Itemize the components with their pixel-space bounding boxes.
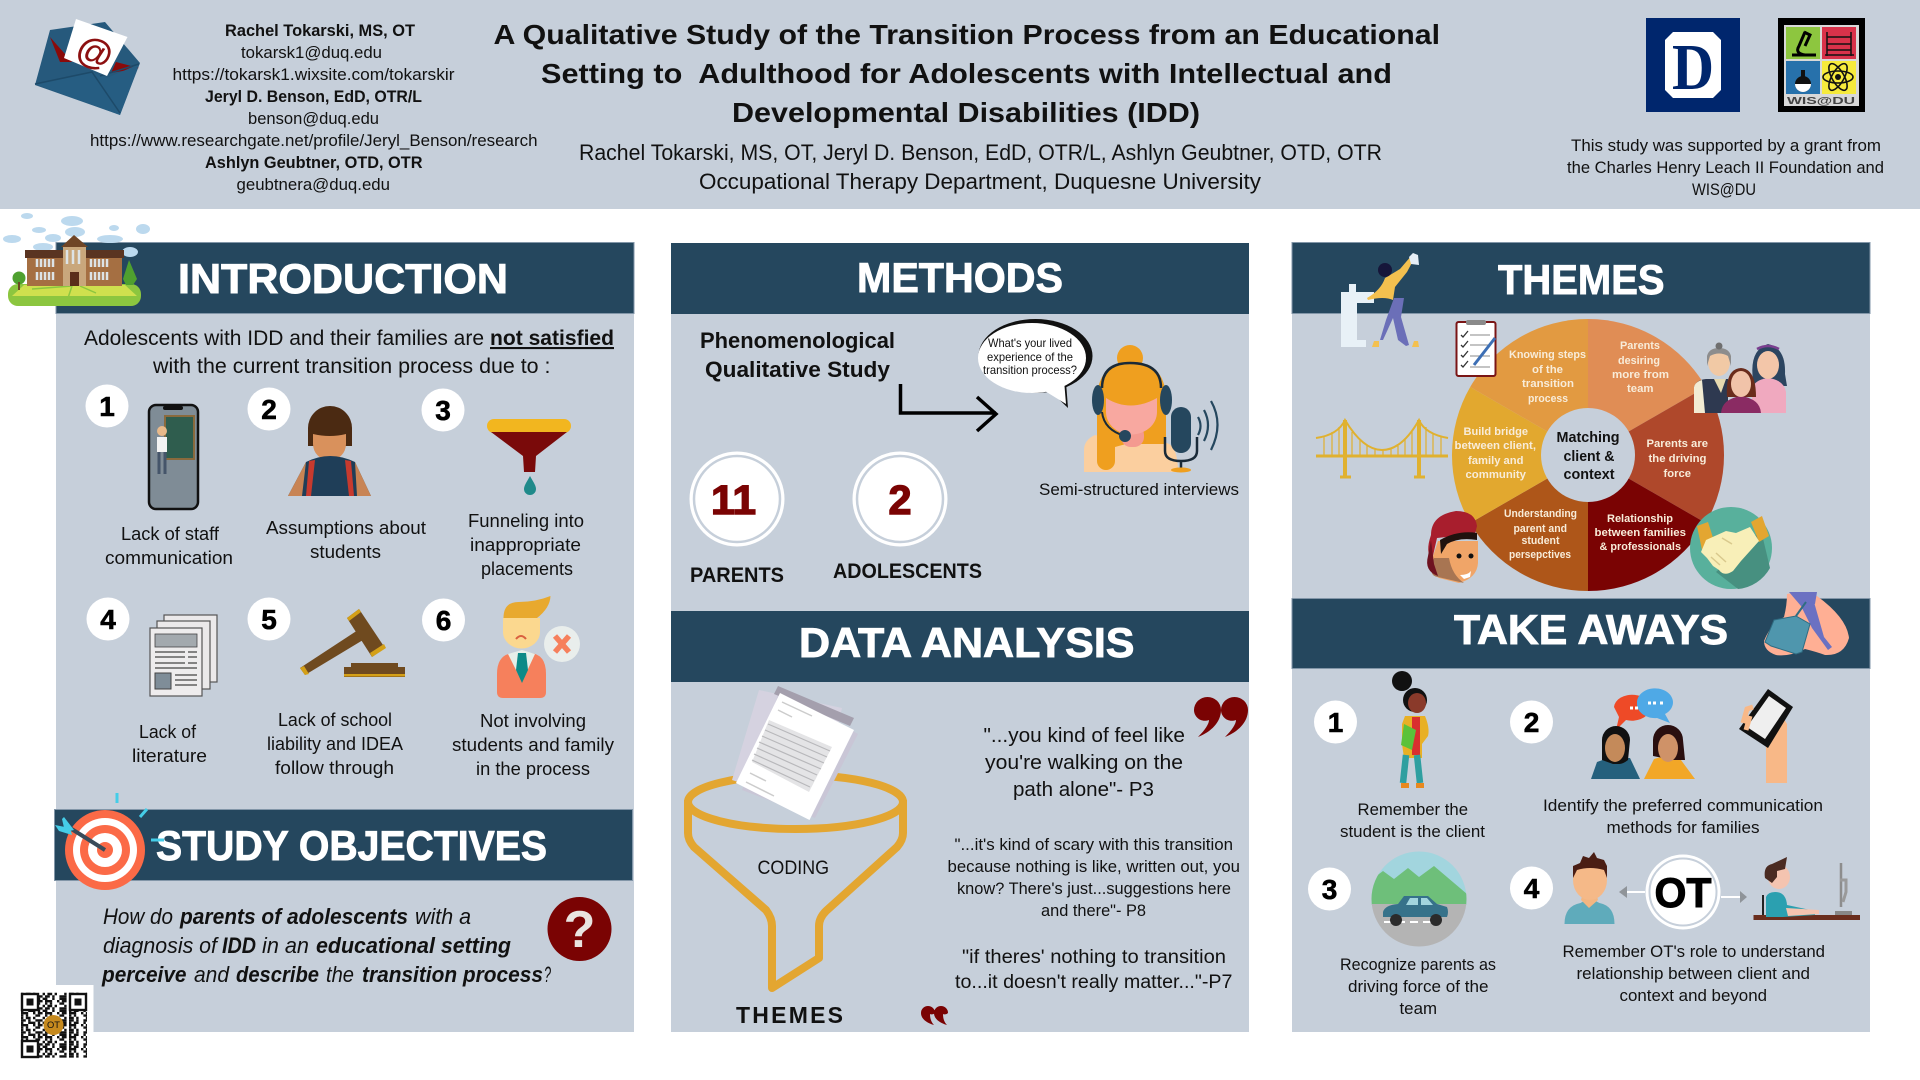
reason 1: staff communication: 1	[99, 391, 115, 422]
reason 3: funneling: Funneling into	[468, 511, 584, 531]
reason 3: funneling: 3	[435, 395, 451, 426]
takeaway 1: student is the client: student is the client	[1340, 823, 1485, 841]
reason 6: not involving	[422, 596, 614, 779]
contact details: Ashlyn Geubtner, OTD, OTR	[205, 154, 423, 172]
segment: driving force: the driving	[1648, 453, 1706, 465]
icon: person at computer	[1754, 857, 1860, 920]
reason 4: literature	[86, 598, 217, 766]
icon: open envelope with @	[35, 19, 140, 115]
funding note: the Charles Henry Leach II Foundation and	[1567, 159, 1884, 177]
QR code	[0, 985, 94, 1063]
quote: nothing to transition to: to...it doesn't really matter..."-P7	[955, 972, 1232, 993]
contact details: Jeryl D. Benson, EdD, OTR/L	[205, 88, 422, 106]
heading: data analysis	[671, 611, 1249, 682]
icon: target with arrow	[55, 793, 164, 890]
icon: gavel	[300, 609, 405, 677]
takeaway 4: OT role: context and beyond	[1620, 987, 1767, 1005]
icon: bridge	[1316, 420, 1448, 478]
heading: study objectives	[54, 810, 632, 880]
quote: scary transition	[948, 836, 1240, 920]
takeaway 3: parents driving force: team	[1400, 1000, 1437, 1018]
reason 6: not involving: Not involving	[480, 711, 586, 731]
reason 1: staff communication: communication	[105, 548, 233, 568]
segment: driving force	[1646, 438, 1708, 480]
panel: methods and data analysis	[671, 243, 1249, 1032]
research question: educational setting	[316, 933, 512, 958]
icon: interviewer with headset and microphone	[1084, 345, 1218, 472]
quote: walking alone: "...you kind of feel like	[984, 724, 1185, 747]
reason 4: literature: literature	[132, 746, 207, 766]
research question: describe	[236, 962, 319, 987]
icon: car on road	[1371, 851, 1467, 948]
reason 2: assumptions: students	[310, 542, 381, 562]
reason 5: liability: Lack of school	[278, 710, 392, 730]
segment: driving force: force	[1664, 468, 1691, 480]
speech bubble: transition process?	[983, 363, 1077, 377]
segment: relationship: & professionals	[1600, 541, 1681, 553]
quote: walking alone: path alone"- P3	[1013, 778, 1154, 801]
logo: WIS@DU	[1778, 18, 1865, 112]
heading: take aways	[1292, 598, 1870, 668]
icon: girl with book	[1392, 671, 1429, 788]
research question: in an	[262, 933, 309, 958]
segment: parents desiring more: desiring	[1618, 355, 1660, 367]
research question	[101, 904, 551, 987]
icon: traveller with bag	[1764, 592, 1849, 655]
stat: 2 adolescents: 2	[888, 477, 912, 523]
contact details: https://tokarsk1.wixsite.com/tokarskir	[172, 66, 455, 84]
icon: open envelope with @: @	[72, 26, 119, 77]
stat: 2 adolescents	[833, 452, 982, 583]
reason 1: staff communication: Lack of staff	[121, 524, 220, 544]
heading: methods	[671, 243, 1249, 314]
quote: walking alone	[984, 724, 1185, 801]
research question: ?	[544, 962, 551, 987]
icon: clipboard	[1456, 320, 1496, 376]
segment: knowing steps	[1509, 349, 1586, 405]
quote: nothing to transition to: "if theres' nothing to transition	[962, 947, 1226, 968]
stat: 11 parents: 11	[711, 477, 756, 523]
takeaway 3: parents driving force: Recognize parents as	[1340, 956, 1496, 974]
segment: build bridge: between client,	[1454, 440, 1536, 452]
quote: scary transition: and there"- P8	[1041, 902, 1146, 920]
icon: papers	[150, 615, 217, 696]
icon: handshake	[1690, 507, 1772, 589]
icon: phone	[149, 405, 198, 509]
reason 6: not involving: students and family	[452, 735, 614, 755]
reason 4: literature: Lack of	[139, 722, 197, 742]
segment: relationship: Relationship	[1607, 513, 1673, 525]
takeaway 2: communication methods	[1510, 688, 1823, 837]
icon: question mark: ?	[564, 901, 595, 959]
heading: themes	[1292, 242, 1870, 314]
title: Setting to Adulthood for Adolescents with Intellectual and	[541, 58, 1392, 89]
reason 5: liability: 5	[261, 604, 277, 635]
research question: parents of adolescents	[179, 904, 408, 929]
stat: 11 parents	[690, 452, 784, 587]
contact details: tokarsk1@duq.edu	[241, 44, 382, 62]
reason 5: liability: liability and IDEA	[267, 734, 403, 754]
wheel centre label: Matching	[1556, 430, 1620, 446]
header band	[0, 0, 1920, 209]
icon: funnel	[487, 419, 571, 495]
authors and department: Rachel Tokarski, MS, OT, Jeryl D. Benson, EdD, OTR/L, Ashlyn Geubtner, OTD, OTR	[579, 140, 1382, 165]
title	[494, 19, 1440, 128]
segment: parents desiring more: more from	[1612, 369, 1669, 381]
icon: family	[1694, 342, 1787, 413]
icon: frowning man with cross	[497, 596, 580, 698]
study type: Phenomenological	[700, 328, 895, 353]
speech bubble	[978, 319, 1092, 408]
quote: walking alone: you're walking on the	[985, 751, 1183, 774]
segment: relationship	[1594, 513, 1686, 553]
study type: Qualitative Study	[705, 357, 891, 382]
research question: the	[326, 962, 354, 987]
chart: themes wheel	[1452, 319, 1724, 591]
reason 3: funneling: placements	[481, 559, 573, 579]
OT circle with arrows	[1619, 854, 1747, 930]
research question: How do	[103, 904, 173, 929]
icon: student	[288, 406, 371, 496]
quote: scary transition: know? There's just...suggestions here	[957, 880, 1231, 898]
intro statement: not satisfied	[490, 327, 614, 350]
takeaway 4: OT role: relationship between client and	[1576, 965, 1810, 983]
segment: relationship: between families	[1594, 527, 1686, 539]
takeaway 4: OT role	[1510, 852, 1860, 1005]
intro statement: with the current transition process due to :	[152, 355, 550, 378]
segment: knowing steps: process	[1528, 393, 1568, 405]
research question: perceive	[101, 962, 186, 987]
takeaway 4: OT role: 4	[1524, 873, 1540, 904]
segment: perspectives	[1504, 508, 1577, 561]
diagram: coding funnel	[688, 686, 903, 1028]
reason 1: staff communication	[86, 384, 233, 568]
icon: client portrait	[1564, 852, 1614, 924]
segment: knowing steps: transition	[1522, 378, 1574, 390]
segment: perspectives: student	[1522, 535, 1560, 547]
icon: closing quote marks	[1194, 697, 1248, 737]
funding note: WIS@DU	[1692, 181, 1756, 199]
research question: transition process	[362, 962, 543, 987]
reason 6: not involving: in the process	[476, 759, 590, 779]
wheel centre label: client &	[1564, 449, 1615, 465]
icon: documents	[732, 686, 858, 820]
stat: 2 adolescents: ADOLESCENTS	[833, 560, 982, 583]
icon: opening quote marks	[921, 1006, 948, 1025]
heading: methods: METHODS	[857, 254, 1063, 301]
segment: driving force: Parents are	[1646, 438, 1708, 450]
authors and department: Occupational Therapy Department, Duquesne University	[699, 169, 1261, 194]
authors and department	[579, 140, 1382, 194]
reason 5: liability	[248, 598, 405, 778]
reason 3: funneling: inappropriate	[470, 535, 581, 555]
takeaway 3: parents driving force	[1308, 851, 1496, 1018]
takeaway 1: student is the client: 1	[1328, 707, 1343, 738]
quote: nothing to transition to	[955, 947, 1232, 993]
quote: scary transition: because nothing is like, written out, you	[948, 858, 1240, 876]
heading: take aways: TAKE AWAYS	[1454, 606, 1728, 653]
wheel centre label: context	[1564, 467, 1615, 483]
quote: scary transition: "...it's kind of scary with this transition	[954, 836, 1233, 854]
takeaway 2: communication methods: 2	[1524, 707, 1539, 738]
segment: perspectives: Understanding	[1504, 508, 1577, 520]
takeaway 3: parents driving force: 3	[1322, 874, 1337, 905]
takeaway 2: communication methods: methods for families	[1606, 819, 1760, 837]
segment: parents desiring more: Parents	[1620, 340, 1660, 352]
segment: build bridge: family and	[1468, 455, 1524, 467]
funding note: This study was supported by a grant from	[1571, 137, 1881, 155]
reason 5: liability: follow through	[275, 758, 394, 778]
research question: with a	[415, 904, 471, 929]
reason 2: assumptions: 2	[261, 394, 277, 425]
reason 4: literature: 4	[100, 604, 116, 635]
segment: parents desiring more: team	[1627, 383, 1654, 395]
diagram: coding funnel: CODING	[758, 858, 829, 879]
takeaway 1: student is the client	[1314, 671, 1485, 841]
segment: perspectives: parent and	[1514, 523, 1567, 535]
takeaway 2: communication methods: Identify the preferred communication	[1543, 797, 1823, 815]
contact details: Rachel Tokarski, MS, OT	[225, 22, 415, 40]
heading: study objectives: STUDY OBJECTIVES	[156, 822, 547, 869]
intro statement	[84, 327, 614, 378]
caption: interviews: Semi-structured interviews	[1039, 480, 1239, 499]
title: Developmental Disabilities (IDD)	[732, 97, 1200, 128]
takeaway 3: parents driving force: driving force of the	[1348, 978, 1488, 996]
segment: perspectives: persepctives	[1509, 549, 1571, 561]
speech bubble: experience of the	[987, 350, 1073, 364]
stat: 11 parents: PARENTS	[690, 564, 784, 587]
panel: introduction and objectives	[3, 213, 634, 1032]
logo: Duquesne D	[1646, 18, 1740, 112]
segment: knowing steps: Knowing steps	[1509, 349, 1586, 361]
title: A Qualitative Study of the Transition Process from an Educational	[494, 19, 1440, 50]
OT circle with arrows: OT	[1654, 869, 1712, 916]
reason 2: assumptions: Assumptions about	[266, 518, 426, 538]
intro statement: Adolescents with IDD and their families are	[84, 327, 484, 350]
diagram: coding funnel: THEMES	[736, 1002, 843, 1028]
contact details: https://www.researchgate.net/profile/Jeryl_Benson/research	[90, 132, 538, 150]
speech bubble: What's your lived	[988, 336, 1072, 350]
study type	[700, 328, 895, 382]
contact details	[90, 22, 538, 194]
segment: build bridge: Build bridge	[1464, 426, 1528, 438]
heading: themes: THEMES	[1498, 256, 1664, 303]
segment: build bridge	[1454, 426, 1536, 481]
icon: two people talking	[1591, 688, 1695, 779]
wheel centre label	[1556, 430, 1620, 483]
research question: and	[194, 962, 230, 987]
research question: IDD	[222, 933, 256, 958]
contact details: benson@duq.edu	[248, 110, 379, 128]
reason 2: assumptions	[248, 388, 426, 562]
contact details: geubtnera@duq.edu	[236, 176, 390, 194]
logo: Duquesne D: D	[1672, 31, 1714, 104]
research question: diagnosis of	[103, 933, 220, 958]
heading: data analysis: DATA ANALYSIS	[799, 619, 1134, 666]
heading: introduction	[56, 242, 634, 314]
icon: woman at printer	[1341, 253, 1419, 347]
logo: WIS@DU: WIS@DU	[1787, 96, 1855, 107]
takeaway 4: OT role: Remember OT's role to understand	[1562, 943, 1825, 961]
reason 6: not involving: 6	[436, 605, 451, 636]
heading: introduction: INTRODUCTION	[178, 255, 508, 302]
reason 3: funneling	[422, 388, 584, 579]
icon: question mark	[548, 897, 612, 961]
icon: boy with cap	[1427, 511, 1478, 583]
arrow to interviews	[900, 384, 996, 431]
icon: school building	[3, 213, 150, 306]
takeaway 1: student is the client: Remember the	[1358, 801, 1468, 819]
panel: themes and take aways	[1292, 242, 1870, 1032]
QR code: OT	[47, 1020, 61, 1030]
icon: hand holding phone	[1739, 689, 1793, 783]
segment: knowing steps: of the	[1532, 364, 1563, 376]
funding note	[1567, 137, 1884, 199]
segment: build bridge: community	[1466, 469, 1527, 481]
segment: parents desiring more	[1612, 340, 1669, 395]
